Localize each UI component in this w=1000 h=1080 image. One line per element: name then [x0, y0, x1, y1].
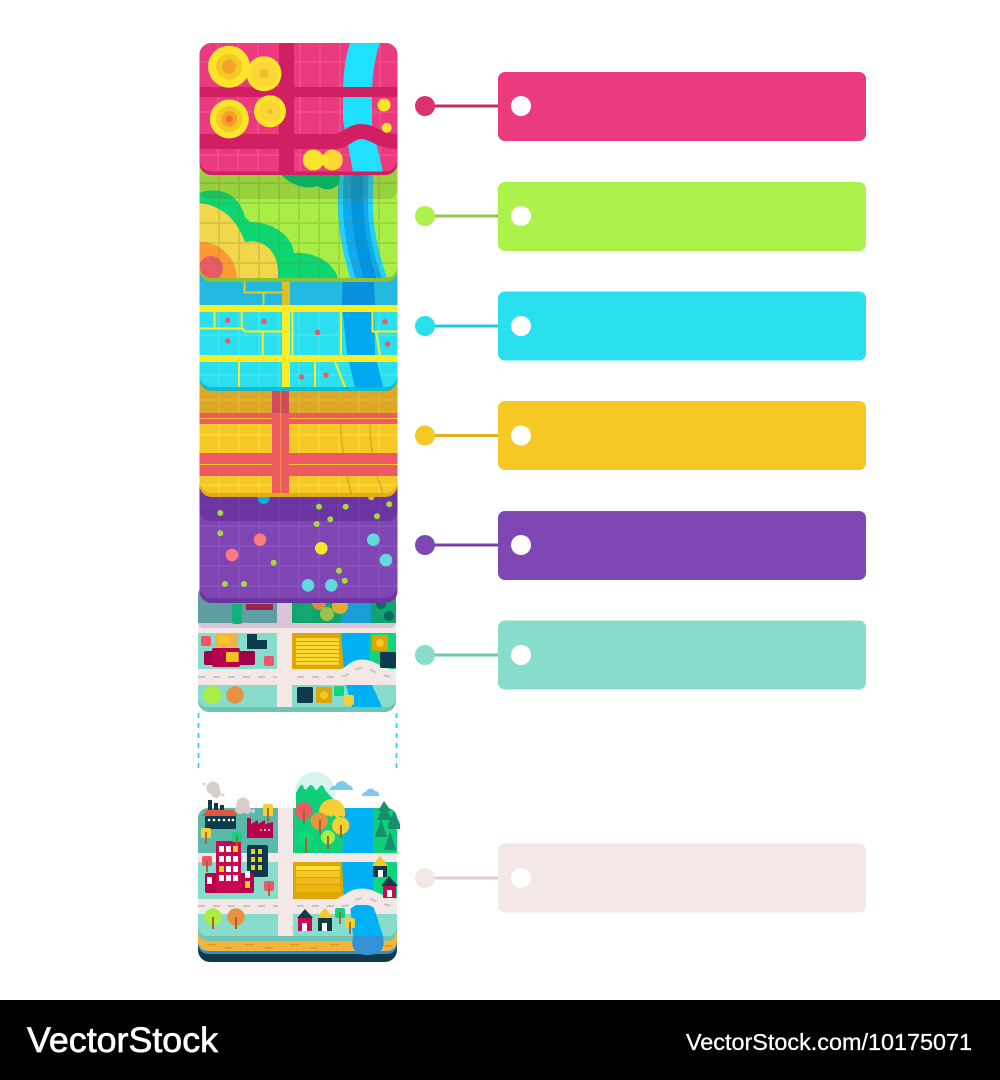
- footer url: VectorStock.com/10175071: [686, 1029, 972, 1055]
- label 7: cream tag: [415, 844, 866, 912]
- label 3: cyan tag: [415, 292, 866, 360]
- wheat field: [293, 862, 344, 899]
- water drop over strata: [352, 936, 384, 955]
- dashed guide lines: [198, 713, 396, 772]
- layer: cyan utilities plan: [199, 262, 398, 391]
- footer bar: [0, 1000, 1000, 1080]
- factory: [202, 800, 238, 829]
- red roads: [200, 391, 398, 493]
- label 6: teal tag: [415, 620, 866, 690]
- label 4: yellow tag: [415, 401, 866, 470]
- label 5: purple tag: [415, 511, 866, 580]
- roads: [199, 43, 398, 172]
- smoke: [202, 782, 255, 814]
- faded details: [232, 603, 394, 624]
- red factory: [247, 818, 273, 838]
- layer: green terrain plan: [200, 163, 398, 282]
- footer brand: VectorStock: [27, 1021, 219, 1060]
- office towers: [205, 841, 268, 893]
- river: [342, 808, 383, 936]
- layer: purple population dots: [199, 475, 398, 603]
- forest: [199, 190, 338, 278]
- base soil strata: [198, 900, 397, 962]
- bridge and road dashes: [198, 667, 397, 678]
- layer: base city map: [198, 772, 400, 962]
- clouds: [330, 781, 379, 796]
- buildings: [201, 634, 396, 705]
- layer: yellow road plan: [199, 370, 398, 497]
- label 1: pink tag: [415, 72, 866, 141]
- river: [342, 282, 375, 305]
- heat blobs: [208, 46, 392, 170]
- layer: teal city plan: [198, 585, 397, 712]
- blocks: [198, 633, 396, 707]
- map ground: [198, 808, 397, 936]
- pine trees: [375, 801, 400, 850]
- houses: [297, 856, 398, 931]
- river: [343, 43, 383, 172]
- heat circles: [200, 242, 237, 278]
- hill: [295, 772, 345, 853]
- roads dashes and bridge: [198, 896, 397, 906]
- layer: pink heat map: [199, 43, 398, 175]
- field rows: [296, 640, 339, 664]
- dots: [217, 494, 392, 587]
- square trees: [201, 804, 355, 934]
- river bands: [355, 165, 372, 285]
- yellow streets: [199, 282, 398, 387]
- red markers: [225, 318, 390, 380]
- sand zone: [199, 203, 278, 278]
- round trees: [204, 802, 349, 929]
- label 2: green tag: [415, 182, 866, 251]
